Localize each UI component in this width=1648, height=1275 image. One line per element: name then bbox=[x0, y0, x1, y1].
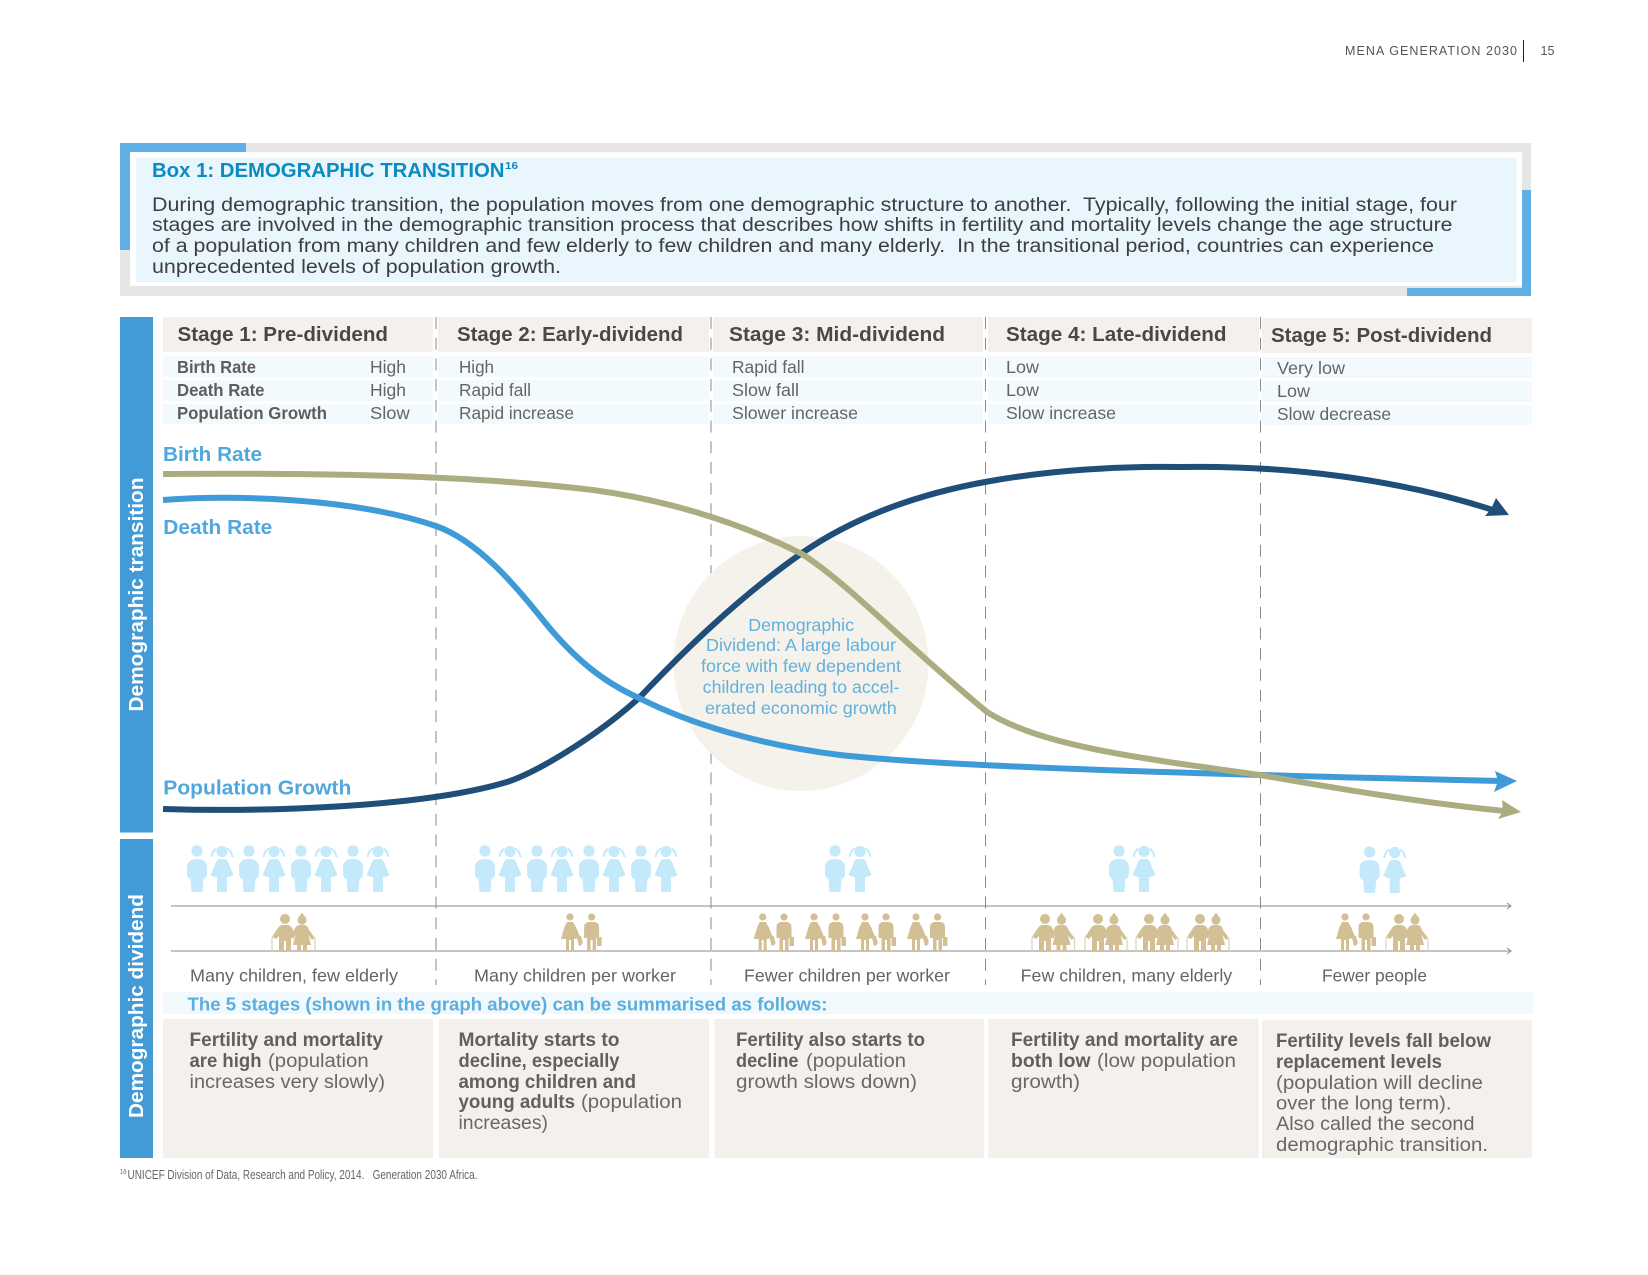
summary heading band: The 5 stages (shown in the graph above) can be summarised as follows: bbox=[188, 994, 828, 1015]
stage headings: Stage 4: Late-dividend bbox=[1006, 324, 1226, 346]
panel: stage 4 summary bbox=[988, 1019, 1259, 1158]
panel: stage 4 summary: Fertility and mortality are bbox=[1011, 1030, 1238, 1051]
stage 3 rates: Slow fall bbox=[732, 380, 799, 400]
page header bbox=[1345, 40, 1555, 62]
panel: stage 5 summary: over the long term). bbox=[1276, 1094, 1452, 1114]
side bar: demographic transition: Demographic transition bbox=[126, 478, 148, 712]
stage 2 rates bbox=[459, 357, 574, 423]
stage 2 rates: Rapid increase bbox=[459, 403, 574, 423]
side bar: demographic transition bbox=[120, 317, 153, 832]
icons: adults row bbox=[272, 912, 1428, 951]
panel: stage 2 summary: decline, especially bbox=[458, 1051, 620, 1072]
panel: stage 1 summary bbox=[163, 1019, 433, 1158]
stage 3 rates bbox=[732, 357, 858, 423]
panel: stage 2 summary: (population bbox=[581, 1092, 682, 1113]
panel: box 1 intro bbox=[120, 143, 1531, 296]
stage headings: Stage 3: Mid-dividend bbox=[729, 324, 945, 346]
stage 1 rates: Population Growth bbox=[177, 403, 327, 423]
panel: stage 1 summary: are high bbox=[190, 1051, 262, 1072]
stage 2 rates: Rapid fall bbox=[459, 380, 531, 400]
stage 1 rates: High bbox=[370, 380, 406, 400]
dependency captions: Fewer children per worker bbox=[744, 966, 950, 986]
box body text: stages are involved in the demographic transition process that describes how shifts in fertility and mortality levels change the age structure bbox=[152, 215, 1452, 236]
panel: stage 2 summary bbox=[439, 1019, 709, 1158]
circle text: erated economic growth bbox=[705, 698, 897, 718]
curve: population growth bbox=[163, 467, 1509, 810]
dependency captions: Few children, many elderly bbox=[1021, 966, 1232, 986]
box body text: During demographic transition, the population moves from one demographic structure to another. Typically, following the initial stage, four bbox=[152, 195, 1458, 216]
curve label: death rate: Death Rate bbox=[163, 516, 272, 539]
circle text: Dividend: A large labour bbox=[706, 635, 896, 655]
panel: stage 4 summary: both low bbox=[1011, 1051, 1091, 1072]
box body text bbox=[152, 195, 1458, 278]
stage 5 rates: Low bbox=[1277, 381, 1310, 401]
panel: stage 1 summary: increases very slowly) bbox=[190, 1072, 385, 1093]
stage 5 rates: Slow decrease bbox=[1277, 404, 1391, 424]
side bar: demographic dividend bbox=[120, 839, 153, 1158]
summary heading band bbox=[163, 992, 1533, 1015]
stage 1 rates bbox=[177, 357, 410, 423]
dependency captions: Fewer people bbox=[1322, 966, 1427, 986]
stage 1 rates: Slow bbox=[370, 403, 410, 423]
stage 5 rates: Very low bbox=[1277, 358, 1345, 378]
circle text: Demographic bbox=[748, 615, 854, 635]
panel: stage 5 summary: replacement levels bbox=[1276, 1052, 1442, 1073]
box body text: of a population from many children and few elderly to few children and many elderly. In the transitional period, countries can experience bbox=[152, 236, 1434, 257]
dependency captions: Many children per worker bbox=[474, 966, 676, 986]
stage headings: Stage 5: Post-dividend bbox=[1271, 325, 1492, 347]
page header: MENA GENERATION 2030 bbox=[1345, 44, 1517, 58]
panel: stage 2 summary: young adults bbox=[458, 1092, 575, 1113]
circle text: children leading to accel- bbox=[703, 677, 900, 697]
circle text: force with few dependent bbox=[701, 656, 901, 676]
curve: death rate bbox=[163, 498, 1517, 792]
footnote: UNICEF Division of Data, Research and Policy, 2014. Generation 2030 Africa. bbox=[128, 1167, 478, 1182]
panel: stage 5 summary: (population will decline bbox=[1276, 1073, 1483, 1094]
stage headings: Stage 1: Pre-dividend bbox=[178, 324, 388, 346]
panel: stage 2 summary: Mortality starts to bbox=[458, 1030, 620, 1051]
panel: stage 5 summary: demographic transition. bbox=[1276, 1135, 1488, 1156]
stage 1 rates: Death Rate bbox=[177, 380, 265, 400]
stage 4 rates bbox=[1006, 357, 1116, 423]
panel: stage 1 summary: Fertility and mortality bbox=[190, 1030, 383, 1051]
panel: stage 5 summary: Also called the second bbox=[1276, 1114, 1474, 1135]
demographic dividend circle bbox=[674, 536, 928, 791]
stage 4 rates: Low bbox=[1006, 380, 1039, 400]
panel: stage 3 summary: (population bbox=[806, 1051, 906, 1072]
stage 4 rates: Low bbox=[1006, 357, 1039, 377]
stage 2 rates: High bbox=[459, 357, 494, 377]
panel: stage 5 summary: Fertility levels fall below bbox=[1276, 1031, 1491, 1052]
box title: 16 bbox=[505, 161, 519, 172]
dependency captions bbox=[190, 966, 1427, 986]
stage 5 rates bbox=[1277, 358, 1391, 424]
stage table row backgrounds bbox=[163, 356, 1532, 425]
panel: stage 1 summary: (population bbox=[268, 1051, 369, 1072]
stage 1 rates: Birth Rate bbox=[177, 357, 256, 377]
side bar: demographic dividend: Demographic dividend bbox=[126, 894, 148, 1118]
panel: stage 3 summary bbox=[714, 1019, 984, 1158]
panel: stage 3 summary: decline bbox=[736, 1051, 798, 1072]
box body text: unprecedented levels of population growth. bbox=[152, 257, 561, 278]
panel: stage 4 summary: (low population bbox=[1097, 1051, 1236, 1072]
box title: Box 1: DEMOGRAPHIC TRANSITION bbox=[152, 159, 504, 182]
panel: stage 4 summary: growth) bbox=[1011, 1072, 1080, 1093]
curve label: birth rate: Birth Rate bbox=[163, 443, 262, 466]
stage 4 rates: Slow increase bbox=[1006, 403, 1116, 423]
stage header backgrounds bbox=[163, 317, 1532, 353]
panel: stage 3 summary: Fertility also starts to bbox=[736, 1030, 925, 1051]
panel: stage 2 summary: among children and bbox=[458, 1072, 636, 1093]
stage 3 rates: Rapid fall bbox=[732, 357, 804, 377]
circle text bbox=[701, 615, 901, 718]
panel: stage 5 summary bbox=[1262, 1020, 1532, 1158]
dependency captions: Many children, few elderly bbox=[190, 966, 398, 986]
panel: stage 3 summary: growth slows down) bbox=[736, 1072, 917, 1093]
footnote: 16 bbox=[120, 1167, 126, 1176]
panel: stage 2 summary: increases) bbox=[458, 1113, 548, 1134]
stage 1 rates: High bbox=[370, 357, 406, 377]
stage headings: Stage 2: Early-dividend bbox=[457, 324, 683, 346]
icons: children row bbox=[187, 845, 1406, 893]
curve: birth rate bbox=[163, 474, 1521, 819]
page header: 15 bbox=[1540, 44, 1555, 58]
stage headings bbox=[178, 324, 1492, 347]
stage 3 rates: Slower increase bbox=[732, 403, 858, 423]
curve label: population growth: Population Growth bbox=[163, 776, 351, 799]
